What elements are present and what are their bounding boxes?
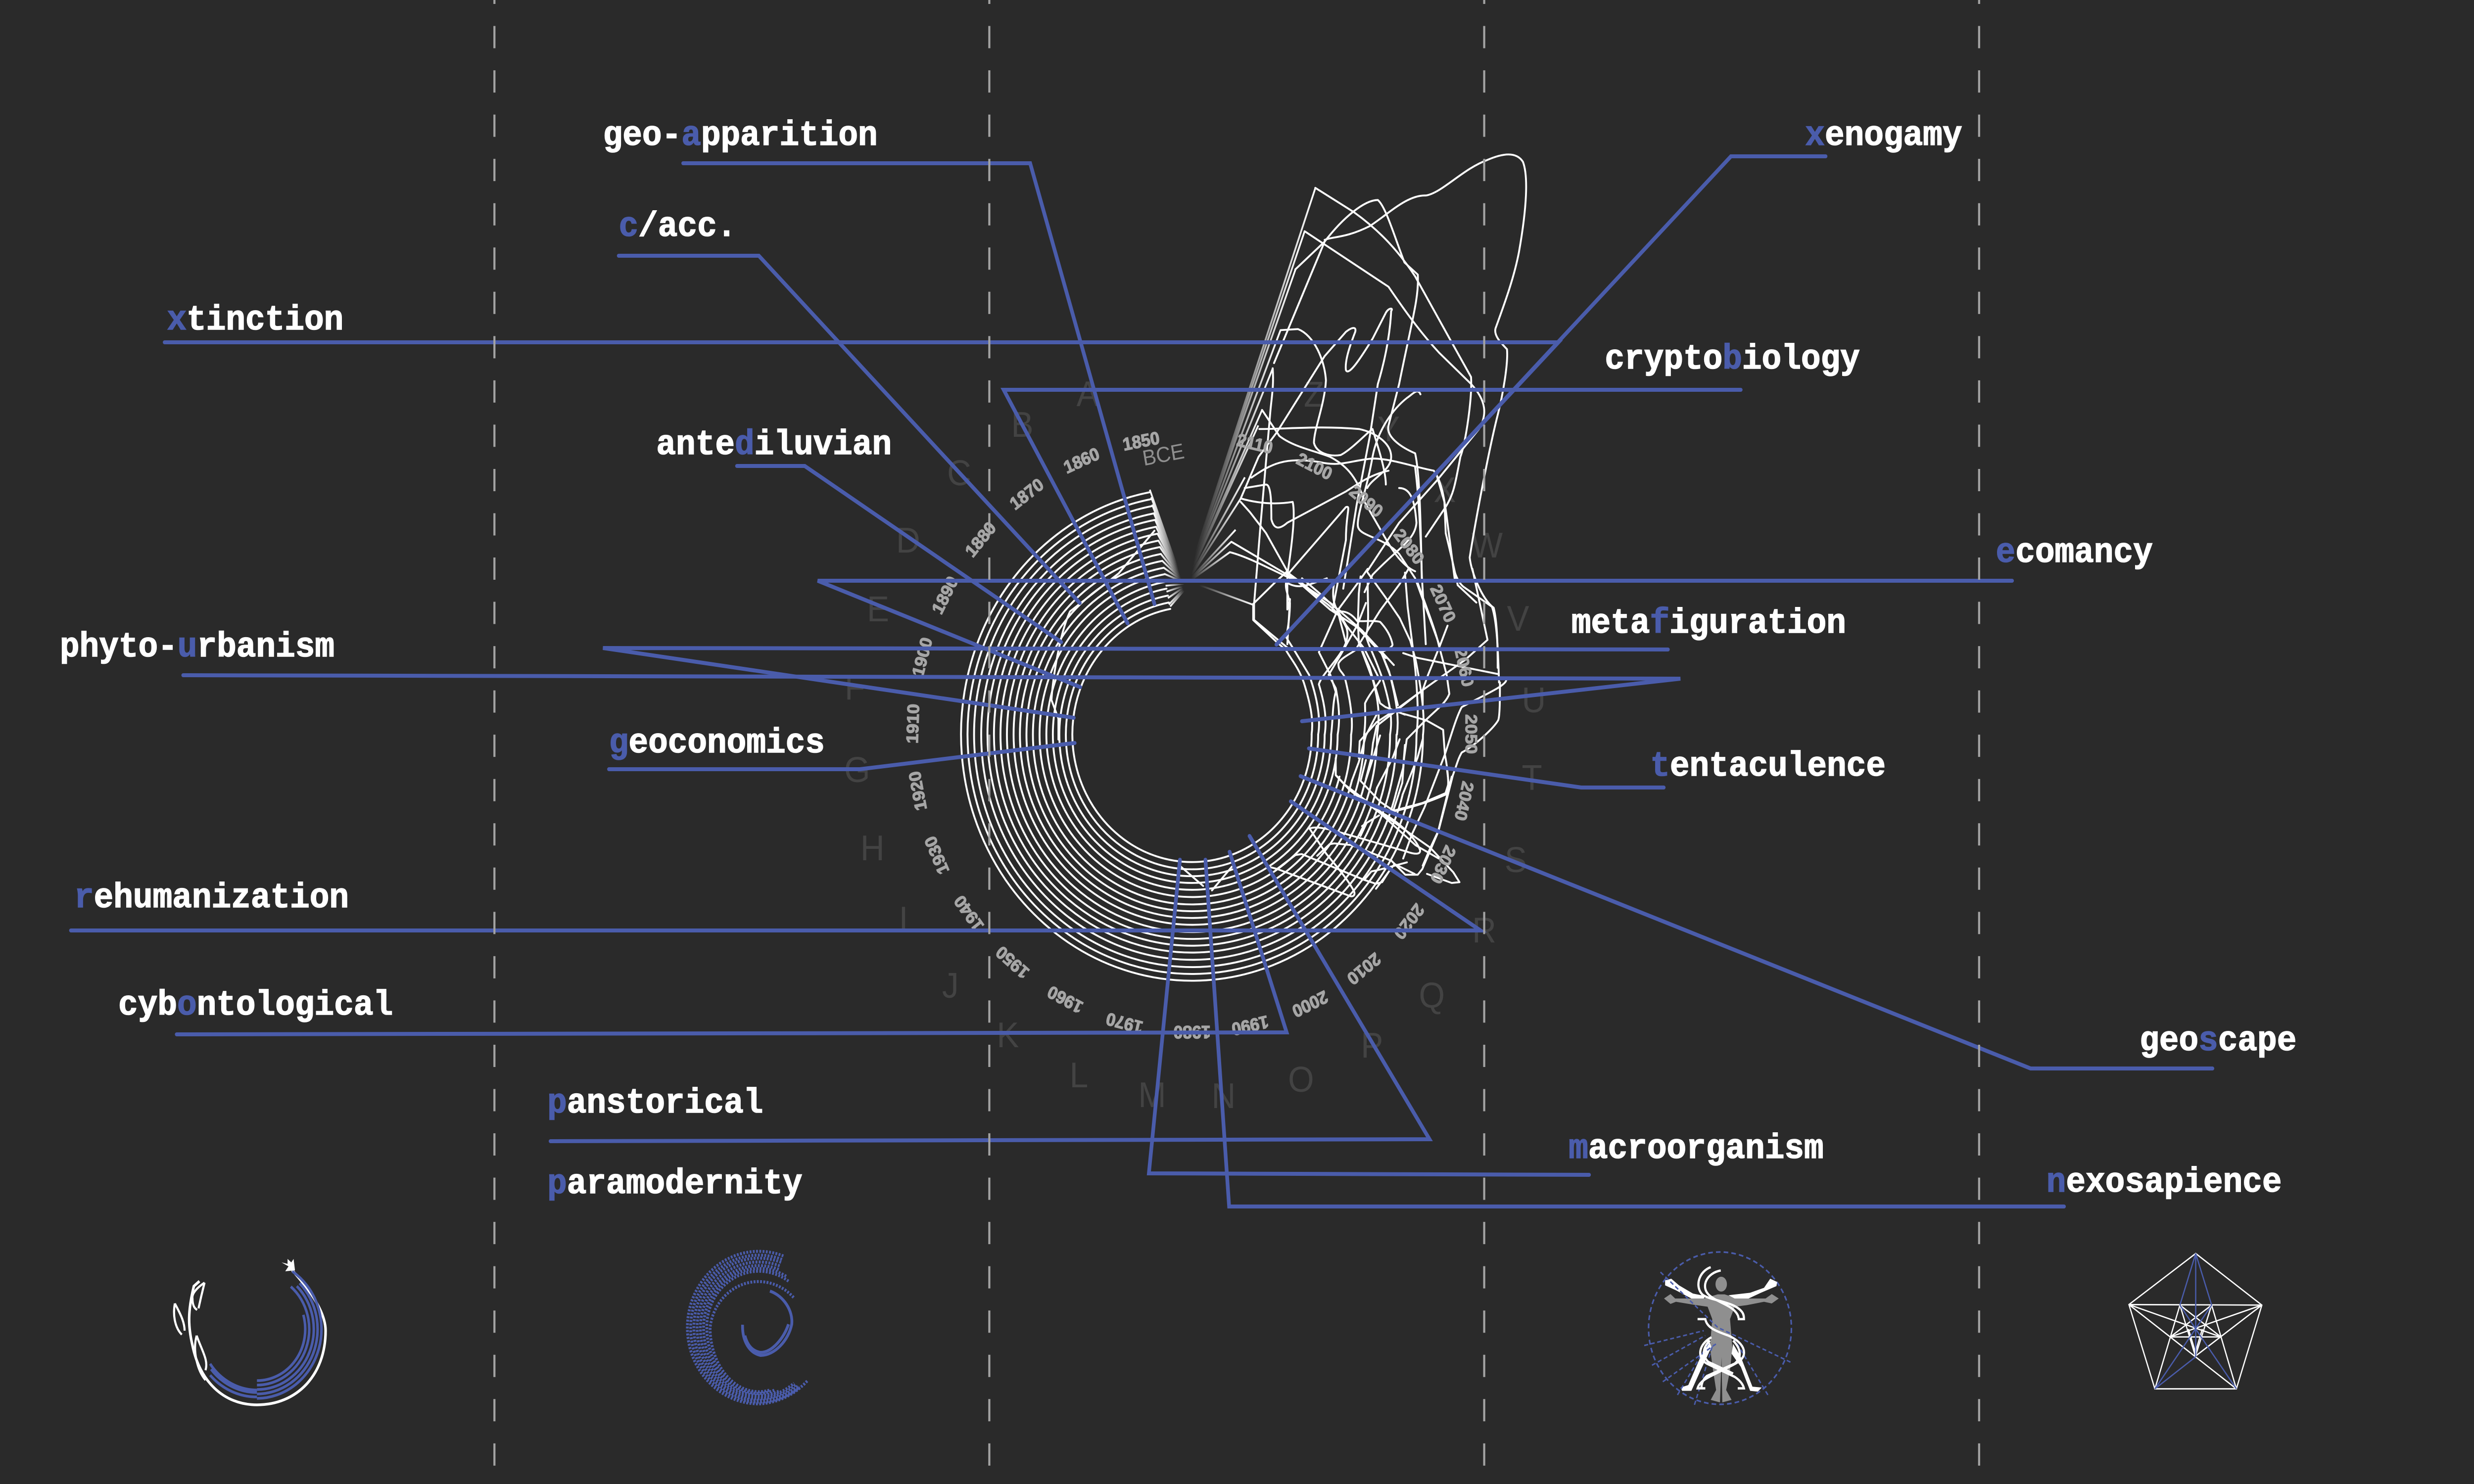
year labels around the spiral: 2090 <box>1346 481 1386 521</box>
term: paramodernity: paramodernity <box>547 1164 803 1204</box>
year labels around the spiral: 1870 <box>1006 474 1047 514</box>
term: cryptobiology: cryptobiology <box>1605 339 1860 379</box>
faint alphabet ring: Z <box>1304 374 1324 414</box>
term: antediluvian: antediluvian <box>656 425 892 465</box>
term: tentaculence <box>1309 746 1886 788</box>
term: c/acc.: c/acc. <box>618 207 736 247</box>
faint alphabet ring: P <box>1361 1025 1383 1065</box>
term: cryptobiology <box>1003 339 1860 623</box>
faint alphabet ring: Q <box>1419 975 1445 1015</box>
faint alphabet ring: I <box>899 899 908 939</box>
term: xenogamy <box>1277 116 1962 645</box>
faint alphabet ring: J <box>942 966 959 1005</box>
year labels around the spiral: 1930 <box>921 833 953 878</box>
future tangle: lower-right loops <box>1271 767 1460 896</box>
term: geoconomics <box>609 723 1075 769</box>
term: tentaculence: tentaculence <box>1650 746 1886 787</box>
icon: plug and leaf ring <box>174 1259 326 1405</box>
faint alphabet ring: H <box>860 828 885 868</box>
year labels around the spiral: 2010 <box>1343 949 1384 989</box>
icon: dotted blue spiral <box>687 1252 808 1404</box>
faint alphabet ring: O <box>1288 1060 1314 1099</box>
term: geo-apparition <box>603 116 1154 604</box>
year labels around the spiral: 1950 <box>993 942 1033 982</box>
right fan rising into the future tangle <box>1186 188 1315 605</box>
term: geoconomics: geoconomics <box>609 723 825 763</box>
faint alphabet ring: L <box>1070 1055 1088 1095</box>
year labels around the spiral: 1920 <box>905 770 931 812</box>
year labels around the spiral <box>903 428 1480 1042</box>
year labels around the spiral: 2100 <box>1293 449 1335 484</box>
term: geoscape: geoscape <box>2140 1021 2296 1061</box>
faint alphabet ring: W <box>1471 525 1503 565</box>
faint alphabet ring: D <box>896 520 920 560</box>
term: panstorical <box>547 836 1429 1141</box>
term: phyto-urbanism <box>60 627 1680 721</box>
term: rehumanization: rehumanization <box>74 878 349 918</box>
faint alphabet ring: T <box>1522 758 1542 797</box>
faint alphabet ring: R <box>1472 910 1496 950</box>
term: antediluvian <box>656 425 1061 642</box>
term: metafiguration <box>603 603 1846 718</box>
term: rehumanization <box>71 801 1480 930</box>
year labels around the spiral: 2030 <box>1427 842 1460 887</box>
year labels around the spiral: 1880 <box>961 518 1000 561</box>
faint alphabet ring <box>844 374 1546 1115</box>
year labels around the spiral: 2040 <box>1451 780 1477 823</box>
year labels around the spiral: 1980 <box>1174 1022 1211 1042</box>
term: metafiguration: metafiguration <box>1571 603 1846 644</box>
year labels around the spiral: 2080 <box>1390 525 1428 568</box>
faint alphabet ring: V <box>1507 599 1529 638</box>
term: geoscape <box>1300 776 2296 1068</box>
year labels around the spiral: 2020 <box>1390 900 1428 943</box>
term: ecomancy <box>818 533 2153 687</box>
faint alphabet ring: S <box>1505 840 1527 880</box>
term: nexosapience <box>1205 860 2282 1206</box>
year labels around the spiral: 1910 <box>903 703 923 744</box>
faint alphabet ring: X <box>1433 470 1456 510</box>
faint alphabet ring: N <box>1211 1076 1236 1115</box>
future tangle: upper section <box>1230 154 1526 668</box>
left fan converging to the BCE point <box>1150 490 1186 606</box>
year labels around the spiral: 1890 <box>928 573 962 617</box>
icon: pentagon star lattice <box>2129 1253 2262 1389</box>
year labels around the spiral: 1900 <box>908 635 936 679</box>
faint alphabet ring: M <box>1138 1075 1166 1114</box>
faint alphabet ring: A <box>1077 374 1099 414</box>
term: macroorganism <box>1149 860 1824 1175</box>
year labels around the spiral: 1990 <box>1230 1012 1270 1039</box>
year labels around the spiral: 2050 <box>1462 714 1480 754</box>
faint alphabet ring: U <box>1522 680 1546 720</box>
faint alphabet ring: Y <box>1378 409 1400 449</box>
term: xtinction: xtinction <box>167 300 343 340</box>
icon: entwined vitruvian figure <box>1644 1252 1792 1405</box>
year labels around the spiral: BCE <box>1141 439 1186 471</box>
faint alphabet ring: B <box>1011 405 1034 444</box>
future tangle: middle section <box>1253 569 1506 866</box>
term: c/acc. <box>618 207 1080 603</box>
term: ecomancy: ecomancy <box>1996 533 2153 573</box>
column dividers <box>494 0 1979 1466</box>
year labels around the spiral: 1960 <box>1045 981 1086 1017</box>
year labels around the spiral: 2110 <box>1235 430 1275 458</box>
faint alphabet ring: K <box>997 1015 1019 1055</box>
term: cybontological <box>118 852 1286 1034</box>
time spiral: concentric rings <box>961 492 1423 981</box>
term: geo-apparition: geo-apparition <box>603 116 878 156</box>
year labels around the spiral: 2060 <box>1451 646 1477 689</box>
faint alphabet ring: F <box>845 667 865 707</box>
term: cybontological: cybontological <box>118 985 393 1025</box>
term: phyto-urbanism: phyto-urbanism <box>60 627 334 667</box>
term: xtinction <box>165 300 1559 645</box>
year labels around the spiral: 1970 <box>1104 1009 1145 1037</box>
faint alphabet ring: E <box>867 589 889 629</box>
faint alphabet ring: G <box>844 750 870 789</box>
term: macroorganism: macroorganism <box>1569 1129 1824 1169</box>
year labels around the spiral: 1860 <box>1061 444 1102 478</box>
year labels around the spiral: 2070 <box>1427 581 1460 626</box>
faint alphabet ring: C <box>947 453 971 493</box>
term: xenogamy: xenogamy <box>1805 116 1962 156</box>
term: nexosapience: nexosapience <box>2046 1162 2282 1203</box>
year labels around the spiral: 1940 <box>951 891 988 935</box>
year labels around the spiral: 1850 <box>1121 428 1161 455</box>
year labels around the spiral: 2000 <box>1289 986 1331 1021</box>
term: panstorical: panstorical <box>547 1083 763 1123</box>
